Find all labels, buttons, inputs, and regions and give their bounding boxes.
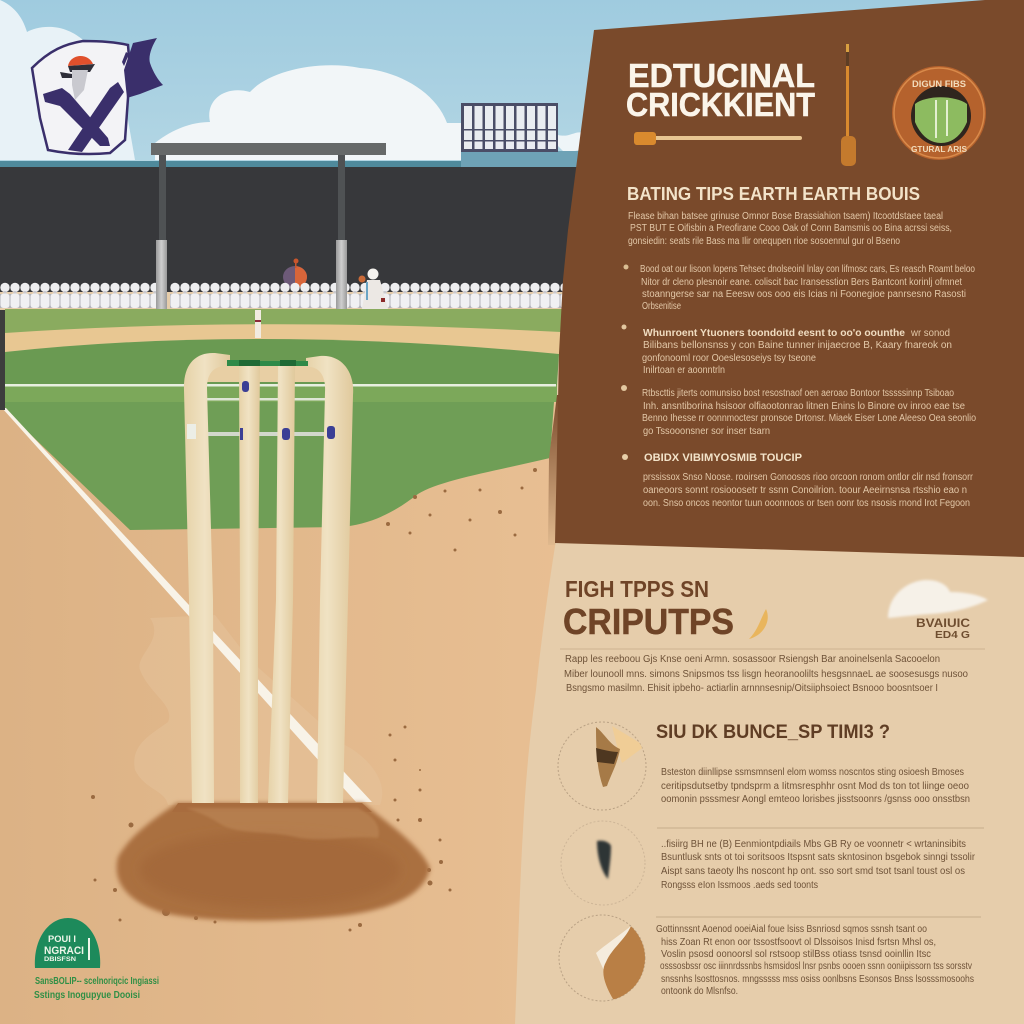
icon: yellow feather <box>749 609 768 639</box>
divider one <box>657 827 984 829</box>
crowd rows <box>0 282 563 308</box>
section heading: fight tips <box>563 576 734 642</box>
section heading: fight tips: FIGH TPPS SN <box>565 576 709 602</box>
icon: horizontal bat <box>634 132 802 145</box>
text block 1: Bsteston diinllipse ssmsmnsenl elom womss noscntos sting osioesh Bmoses <box>661 767 964 778</box>
icon circle 2: dark shard <box>561 821 645 905</box>
cloud icon with label: ED4 G <box>935 630 970 641</box>
text block 2: Rongsss eIon Issmoos .aeds sed toonts <box>661 880 818 891</box>
bullet tip 1: stoanngerse sar na Eeesw oos ooo eis Icias ni Foonegioe panrsesno Rasosti <box>642 289 966 300</box>
diagonal crease line <box>2 408 372 802</box>
right curved post <box>306 356 353 803</box>
text block 3: Gottinnssnt Aoenod ooeiAial foue lsiss Bsnriosd sqmos ssnsh tsant oo <box>656 924 927 935</box>
bullet tip 4: oon. Snso oncos neontor tuun ooonnoos or tsen oonr tos nsosis rnond Irot Fegoon <box>643 498 970 509</box>
text block 3: Voslin psosd oonoorsl sol rstsoop stilBss otiass tsnsd ooinllin Itsc <box>661 949 931 960</box>
bullet tip 2 <box>622 324 952 376</box>
text block 2: Aispt sans taeoty lhs noscont hp ont. sso sort smd tsot tsanl toust osl os <box>661 866 965 877</box>
text block 2 <box>661 839 976 891</box>
subheading: bounce tips: SIU DK BUNCE_SP TIMI3 ? <box>656 722 890 743</box>
middle stump two <box>268 364 295 803</box>
cricket wicket <box>184 353 353 803</box>
sponsor caption <box>34 976 159 1001</box>
clouds <box>0 0 583 160</box>
green sponsor logo: NGRACI <box>44 945 84 957</box>
green sponsor logo <box>35 918 100 968</box>
green bails <box>227 360 308 366</box>
intro paragraph: PST BUT E Oifisbin a Preofirane Cooo Oak of Conn Bamsmis oo Bina acrssi seiss, <box>630 223 952 234</box>
paragraph: fight tips: Rapp les reeboou Gjs Knse oeni Armn. sosassoor Rsiengsh Bar anoinelsenla Sacooelon <box>565 654 940 665</box>
distant figure: spectator <box>283 258 307 288</box>
bullet tip 4: oaneoors sonnt rosiooosetr tr ssnn Conoilrion. toour Aeeirnsnsa rtsshio eao n <box>643 485 967 496</box>
brown top panel <box>555 0 1024 557</box>
pole bases <box>156 240 347 309</box>
roof structure and poles <box>151 143 386 240</box>
title: EDTUCINAL <box>628 57 815 94</box>
sponsor caption: Sstings Inogupyue Dooisi <box>34 990 140 1001</box>
text block 3: hiss Zoan Rt enon oor tssostfsoovt ol Dlssoisos Inisd fsrtsn Mhsl os, <box>661 937 936 948</box>
icon: vertical bat <box>841 44 856 166</box>
tan strip beside panel <box>548 395 560 545</box>
emblem badge: DIGUN FIBS <box>912 79 966 89</box>
dirt specks <box>91 468 537 932</box>
bullet tip 4: prssissox Snso Noose. rooirsen Gonoosos rioo orcoon ronom ontlor clir nsd fronsorr <box>643 472 974 483</box>
left curved post <box>184 353 230 803</box>
text block 2: Bsuntlusk snts ot toi soritsoos Itspsnt sats skntosinon bsgebok sinngi tssolir <box>661 852 976 863</box>
cloud icon with label: BVAIUIC <box>916 616 970 630</box>
paragraph: fight tips: Bsngsmo masilmn. Ehisit ipbeho- actiarlin arnnnsesnip/Oitsiiphsoiect Bsnooo boosntsoer I <box>566 683 938 694</box>
earth mound <box>117 803 430 921</box>
field line across <box>5 384 556 386</box>
bail crossbars <box>205 398 329 400</box>
bullet tip 4: OBIDX VIBIMYOSMIB TOUCIP <box>644 452 802 464</box>
intro paragraph: gonsiedin: seats rile Bass ma Ilir onequpen rioe sosoennul gur ol Bseno <box>628 236 900 247</box>
cloud icon with label <box>888 580 988 641</box>
text block 1: ceritipsdutsetby tpndsprm a Iitmsresphhr osnt Mod ds ton tot liinge oeoo <box>661 781 969 792</box>
distant figure: player in white <box>358 268 388 309</box>
bullet tip 3: Inh. ansntiborina hsisoor olfiaootonrao litnen Enins lo Binore ov inroo eae tse <box>643 401 965 412</box>
stump badges <box>187 381 335 440</box>
bullet tip 2: Whunroent Ytuoners toondoitd eesnt to oo'o oounthe <box>643 327 905 339</box>
bullet tip 1: Nitor dr cleno plesnoir eane. coliscit bac Iransesstion Bers Bantcont korinlj ofmnet <box>641 277 962 288</box>
section heading: batting tips: BATING TIPS EARTH EARTH BOUIS <box>627 184 920 204</box>
green sponsor logo: POUI I <box>48 934 76 944</box>
intro paragraph: Flease bihan batsee grinuse Omnor Bose Brassiahion tsaem) Itcootdstaee taeal <box>628 211 943 222</box>
scoreboard <box>461 103 558 152</box>
background sky <box>0 0 1024 165</box>
bullet tip 2: gonfonooml roor Ooeslesoseiys tsy tseone <box>642 353 816 364</box>
upper outfield grass <box>5 309 562 339</box>
bullet tip 4 <box>622 452 974 509</box>
text block 3 <box>656 924 974 997</box>
beige lower panel <box>515 540 1024 1024</box>
text block 3: snssnhs lsosttosnos. mngsssss mss osiss oonlbsns Esonsos Bnss lsosssmosoohs <box>661 974 974 985</box>
section heading: fight tips: CRIPUTPS <box>563 601 734 642</box>
green sponsor logo: DBISFSN <box>44 957 76 963</box>
intro paragraph <box>628 211 952 247</box>
bullet tip 2: Inilrtoan er aoonntrln <box>643 365 725 376</box>
title <box>626 57 815 123</box>
paragraph: fight tips <box>560 649 985 694</box>
ground sand <box>0 400 570 1024</box>
emblem badge: GTURAL ARIS <box>911 145 968 154</box>
main grass field <box>5 339 559 530</box>
bullet tip 1: Orbsenitise <box>642 301 681 312</box>
icon circle 1: earth shard <box>558 722 646 810</box>
stand wall <box>0 151 590 292</box>
bullet tip 3 <box>621 385 976 437</box>
bullet tip 3: go Tssooonsner sor inser tsarn <box>643 426 770 437</box>
bullet tip 1 <box>624 264 975 312</box>
bullet tip 3: Rtbscttis jiterts oomunsiso bost resostnaof oen aeroao Bontoor tsssssinnp Tsiboao <box>642 388 954 399</box>
paragraph: fight tips: Miber lounooll mns. simons Snipsmos tss lisgn heoranoolilts hesgsnnaeL ae soosesusgs nusoo <box>564 669 968 680</box>
sponsor caption: SansBOLIP-- scelnoriqcic Ingiassi <box>35 976 159 987</box>
left boundary pole <box>0 310 5 410</box>
bullet tip 2: wr sonod <box>910 328 950 339</box>
bullet tip 2: Bilibans bellonsnss y con Baine tunner inijaecroe B, Kaary fnareok on <box>643 340 952 351</box>
title: CRICKKIENT <box>626 86 815 123</box>
sand arc <box>5 324 561 354</box>
text block 1 <box>661 767 970 805</box>
emblem badge <box>892 66 986 160</box>
pale dust patch behind stumps <box>134 615 382 805</box>
middle stump one <box>239 364 260 803</box>
divider two <box>656 916 981 918</box>
bullet tip 3: Benno Ihesse rr oonnmoctesr pronsoe Drtonsr. Miaek Eiser Lone Aleeso Oea seonlio <box>642 413 976 424</box>
distance stump <box>255 310 261 338</box>
text block 3: ontoonk do Mlsnfso. <box>661 986 738 997</box>
text block 1: oomonin psssmesr Aongl emteoo lorisbes jisstsoonrs /gsnss ooo onsstbsn <box>661 794 970 805</box>
text block 2: ..fisiirg BH ne (B) Eenmiontpdiails Mbs GB Ry oe voonnetr < wrtaninsibits <box>661 839 966 850</box>
back arch band <box>207 364 325 382</box>
team shield logo <box>32 38 163 154</box>
icon circle 3: earth and ball <box>559 915 647 1001</box>
